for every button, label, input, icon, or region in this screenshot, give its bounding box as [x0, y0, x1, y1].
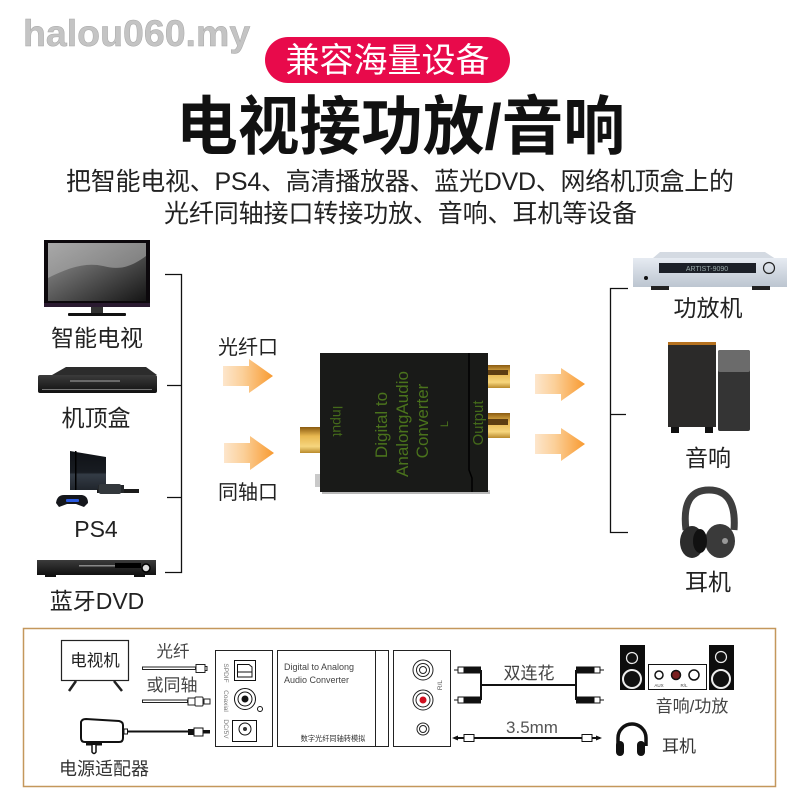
panel: input side [216, 650, 272, 746]
icon: power adapter [81, 719, 210, 754]
arrow: output bottom [535, 428, 585, 461]
device: digital to analog converter: Input [330, 405, 346, 437]
panel: output side: R/L [437, 680, 444, 690]
cable: dual RCA [454, 666, 604, 704]
panel: connection diagram [24, 628, 776, 786]
icon: amplifier: ARTIST-9090 [686, 266, 728, 273]
icon: DVD player [37, 560, 156, 577]
label: amplifier: 功放机 [674, 295, 742, 321]
icon: audio system: AUX [654, 683, 664, 688]
device: digital to analog converter: Digital to [372, 392, 391, 458]
badge: compatible devices: 兼容海量设备 [286, 42, 490, 80]
icon: audio system: R/L [680, 683, 688, 688]
arrow: output top [535, 368, 585, 401]
label: dual RCA: 双连花 [504, 664, 554, 683]
subtitle [66, 168, 734, 228]
subtitle: 光纤同轴接口转接功放、音响、耳机等设备 [164, 200, 637, 228]
label: 3.5mm: 3.5mm [506, 718, 558, 737]
icon: television [44, 240, 150, 316]
panel: converter top view: 数字光纤同轴转模拟 [301, 734, 365, 743]
device: digital to analog converter: Output [470, 400, 487, 446]
icon: TV set: 电视机 [70, 651, 120, 670]
label: speaker/amplifier: 音响/功放 [656, 697, 728, 716]
label: PS4: PS4 [74, 516, 118, 542]
panel: converter top view: Audio Converter [284, 675, 349, 685]
panel: input side: DC/5V [222, 719, 229, 739]
panel: input devices [37, 240, 157, 614]
bracket: outputs [610, 288, 628, 532]
icon: speakers [668, 342, 750, 433]
label: or coaxial: 或同轴 [146, 676, 198, 695]
icon: amplifier [633, 252, 787, 290]
badge: compatible devices [265, 37, 510, 83]
label: speakers: 音响 [685, 445, 731, 471]
panel: input side: Coaxial [222, 690, 229, 712]
bracket: inputs [165, 274, 182, 572]
label: smart TV: 智能电视 [51, 325, 143, 351]
device: digital to analog converter: AnalongAudio [393, 371, 412, 477]
panel: input side: SPDIF [222, 663, 229, 683]
cable: 3.5mm [452, 734, 602, 742]
label: optical: 光纤 [156, 642, 190, 661]
panel: converter top view [278, 650, 388, 746]
watermark: halou060.my [23, 12, 250, 54]
arrow: optical input [223, 359, 273, 393]
title: 电视接功放/音响 [176, 91, 625, 163]
icon: TV set [62, 640, 128, 691]
icon: audio system [620, 645, 734, 690]
label: set-top box: 机顶盒 [62, 405, 130, 431]
cable: optical [142, 664, 207, 672]
label: power adapter: 电源适配器 [59, 759, 149, 779]
device: digital to analog converter [300, 353, 510, 494]
icon: PS4 console [56, 451, 139, 507]
device: digital to analog converter: Converter [413, 383, 432, 458]
panel: output side [394, 650, 450, 746]
label: coaxial port: 同轴口 [218, 481, 278, 504]
label: optical port: 光纤口 [218, 336, 278, 359]
device: digital to analog converter: L [439, 421, 451, 427]
label: headphones: 耳机 [662, 737, 696, 756]
panel: converter top view: Digital to Analong [284, 662, 354, 672]
icon: set-top box [38, 367, 157, 393]
panel: output devices [633, 252, 787, 595]
label: headphones: 耳机 [685, 569, 731, 595]
label: Bluetooth DVD: 蓝牙DVD [50, 588, 144, 614]
arrow: coaxial input [224, 436, 274, 470]
cable: coaxial [142, 697, 210, 706]
icon: headphones outline [616, 724, 646, 756]
subtitle: 把智能电视、PS4、高清播放器、蓝光DVD、网络机顶盒上的 [66, 168, 734, 196]
icon: headphones [680, 490, 735, 558]
